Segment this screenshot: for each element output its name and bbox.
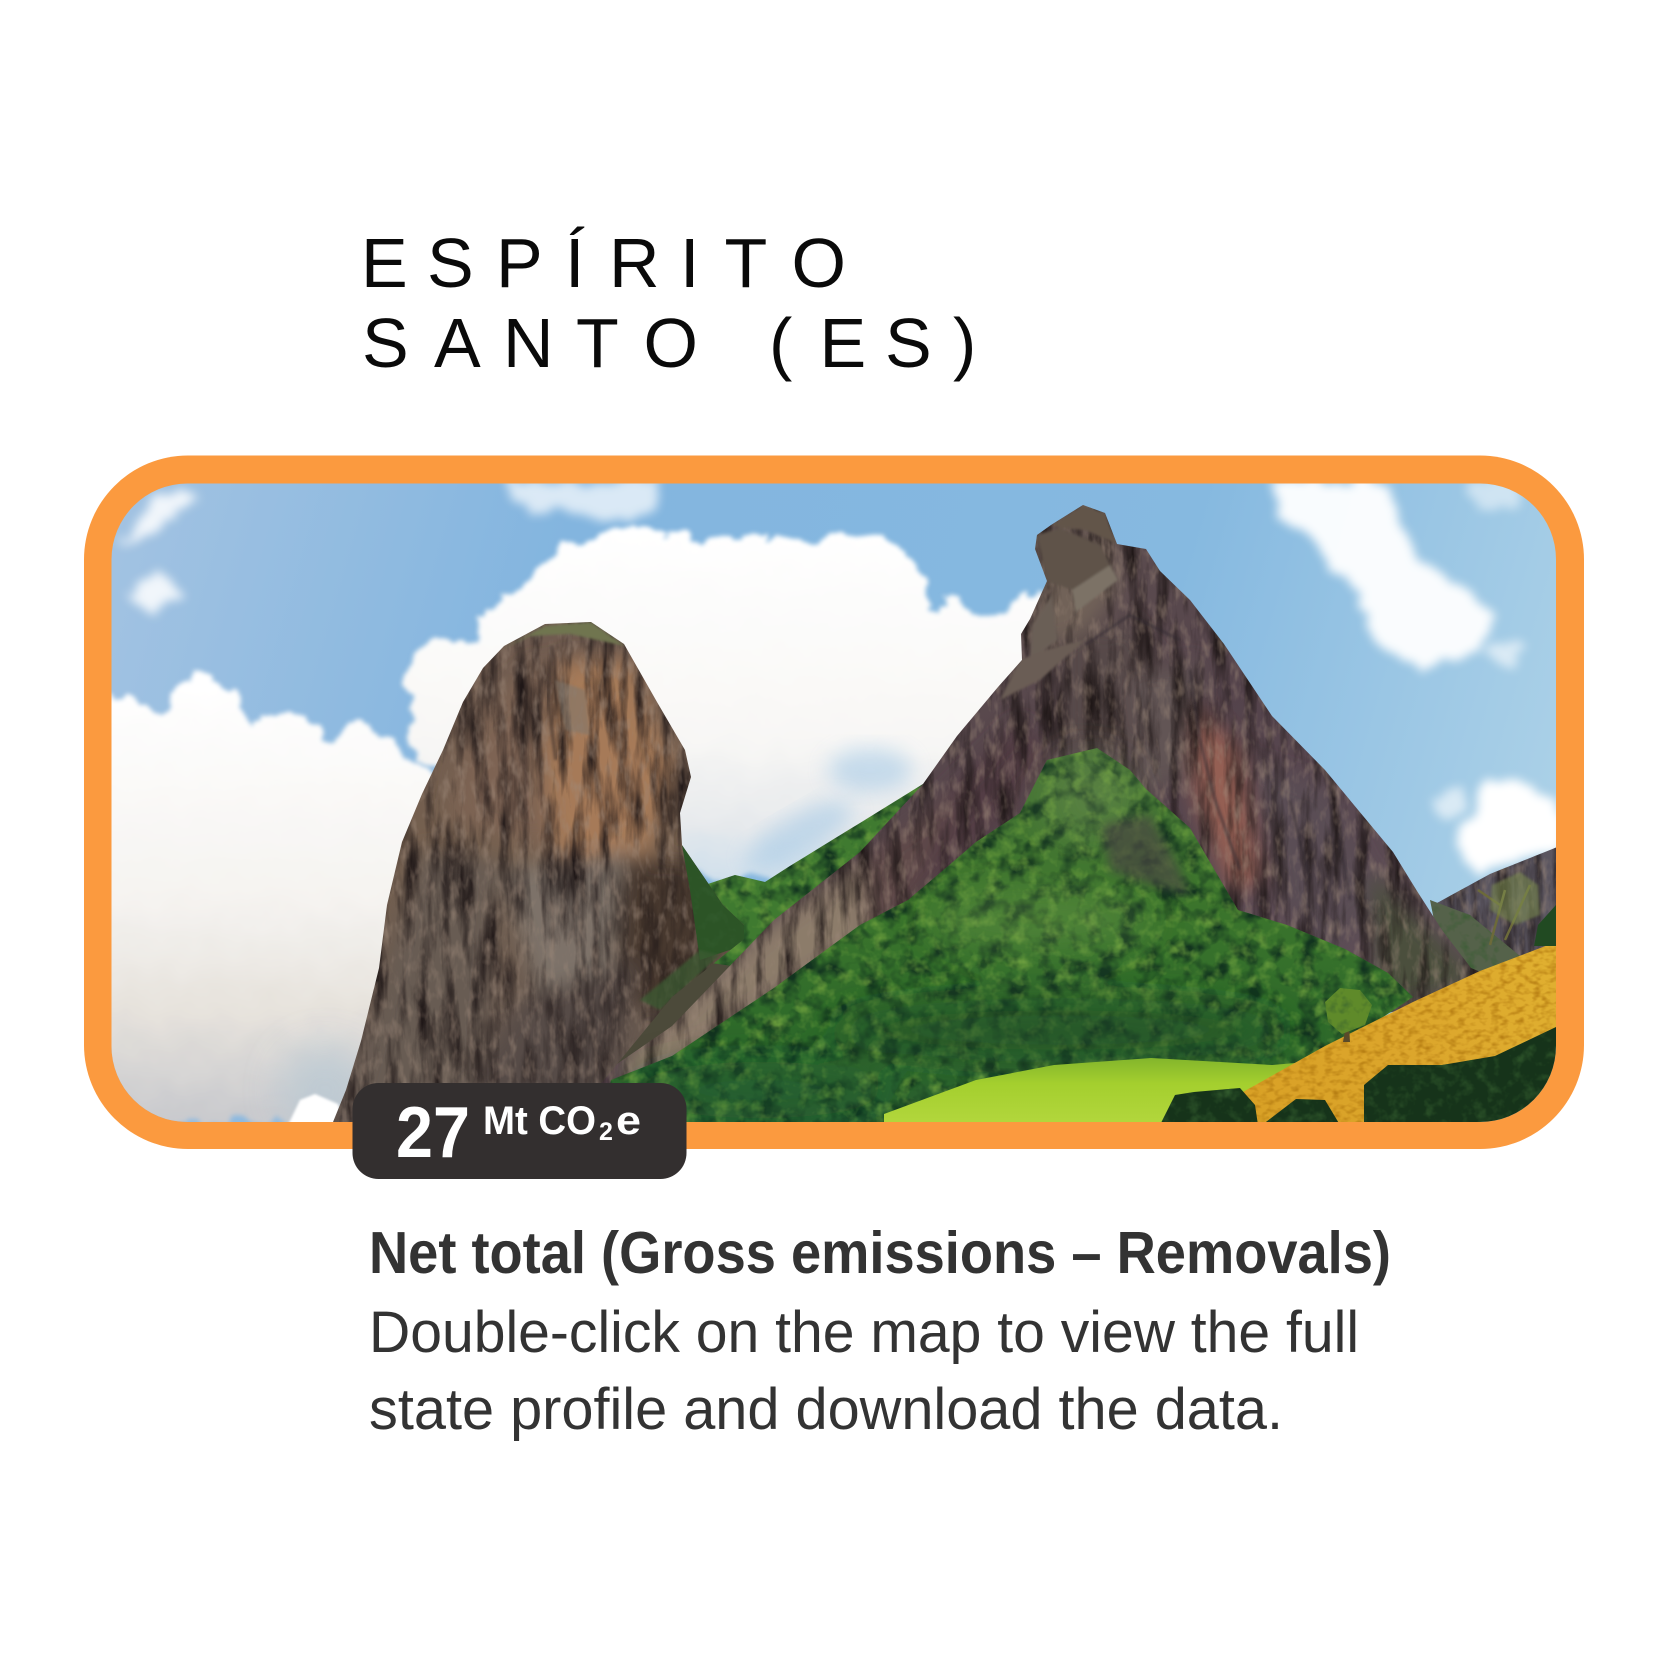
shrubs on left peak (682, 845, 744, 960)
orange frame (84, 456, 1584, 1149)
value: 27 (396, 1093, 470, 1173)
rock outcrop in forest (1102, 815, 1190, 895)
forest shading (630, 755, 1290, 1118)
rock creases (1085, 615, 1350, 900)
description text (369, 1220, 1391, 1442)
saddle between peaks (590, 900, 780, 1095)
infographic canvas (84, 226, 1584, 1441)
left peak (320, 610, 760, 1130)
unit: Mt CO (483, 1099, 596, 1143)
title: ESPÍRITO (361, 224, 846, 302)
dark bushes foreground (1160, 1027, 1560, 1125)
cloud: right lower (1459, 782, 1560, 875)
body line 2: state profile and download the data. (369, 1377, 1283, 1442)
summit vegetation (500, 622, 625, 650)
sky clouds (100, 480, 1560, 1135)
unit: 2 (599, 1118, 613, 1146)
title: SANTO(ES) (362, 304, 976, 382)
bold heading line: Net total (Gross emissions – Removals) (369, 1220, 1391, 1286)
forest (600, 748, 1413, 1130)
summit boulders (1000, 505, 1118, 700)
yellow hill (1243, 942, 1560, 1125)
photo: mountains (100, 480, 1560, 1135)
title (361, 224, 976, 382)
haze under left cloud (280, 1045, 370, 1135)
small cloud at base (288, 1094, 345, 1125)
body line 1: Double-click on the map to view the full (369, 1300, 1359, 1365)
right peak (550, 500, 1500, 1130)
small tree on hill (1325, 988, 1372, 1042)
cloud: behind peaks (402, 525, 1060, 882)
unit: e (616, 1099, 641, 1143)
unit (483, 1099, 641, 1146)
distant slope vegetation (1430, 900, 1525, 985)
distant mountain (1437, 846, 1560, 1000)
blue haze below mid cloud (828, 748, 912, 792)
badge: 27 Mt CO2e (352, 1083, 686, 1179)
ridge vegetation (690, 784, 940, 970)
bare tree at right edge (1478, 872, 1560, 946)
panel: photo frame (84, 456, 1584, 1149)
meadow (884, 1058, 1330, 1125)
summit crack (548, 645, 556, 760)
cloud: big left (100, 677, 460, 1122)
sky (111, 483, 1557, 1123)
pale rock patch (555, 680, 590, 735)
